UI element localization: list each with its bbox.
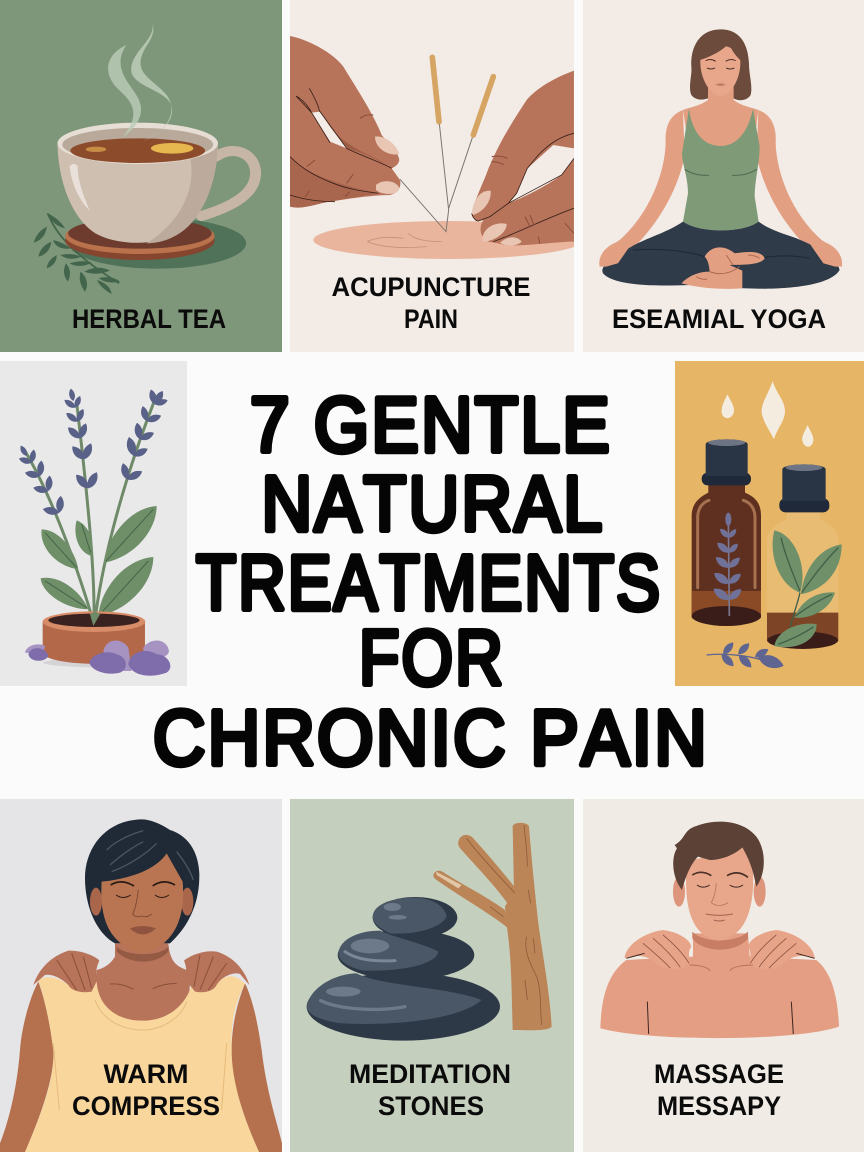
icon: tea cup [34, 21, 256, 294]
panel: herbal tea [0, 0, 282, 352]
panel: warm compress [0, 799, 282, 1152]
illustration: man receiving massage [600, 822, 839, 1038]
illustration: stacked stones and branch [307, 823, 552, 1041]
panel: meditation stones [290, 799, 574, 1152]
label: warm compress [72, 1059, 220, 1121]
label: meditation stones [349, 1059, 511, 1121]
label: massage: MASSAGE [654, 1059, 784, 1089]
title: FOR [359, 614, 505, 702]
panel: massage [583, 799, 864, 1152]
label: acupuncture pain [332, 272, 530, 334]
label: acupuncture pain: ACUPUNCTURE [332, 272, 530, 302]
illustration: hands and needles [290, 36, 583, 259]
label: yoga: ESEAMIAL YOGA [612, 304, 826, 334]
title [153, 381, 709, 782]
illustration: woman with hands on shoulders [0, 819, 282, 1152]
label: meditation stones: STONES [378, 1091, 484, 1121]
panel: essential oils [675, 361, 864, 686]
panel: lavender [0, 361, 187, 686]
illustration: oil bottles [692, 381, 842, 672]
label: massage [654, 1059, 784, 1121]
label: warm compress: WARM [104, 1059, 188, 1089]
illustration: seated woman [599, 29, 842, 289]
label: acupuncture pain: PAIN [404, 304, 458, 334]
panel: acupuncture [290, 0, 583, 352]
label: herbal tea: HERBAL TEA [72, 304, 226, 334]
title: 7 GENTLE [250, 381, 612, 469]
title: TREATMENTS [196, 539, 662, 627]
label: meditation stones: MEDITATION [349, 1059, 511, 1089]
panel: yoga [583, 0, 864, 352]
label: massage: MESSAPY [657, 1091, 781, 1121]
illustration: potted lavender [18, 388, 170, 676]
title: CHRONIC PAIN [153, 694, 709, 782]
label: warm compress: COMPRESS [72, 1091, 220, 1121]
title: NATURAL [262, 460, 604, 548]
